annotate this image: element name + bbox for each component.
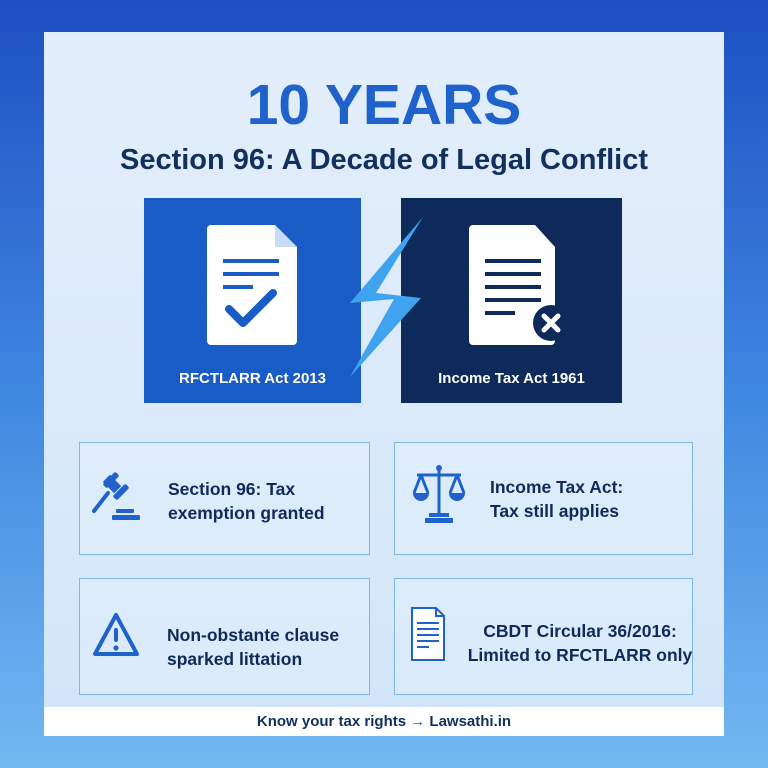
card: CBDT [394, 578, 693, 695]
text: CBDT Circular 36/2016: [483, 621, 677, 641]
text: Limited to RFCTLARR only [468, 645, 692, 665]
card: income tax [394, 442, 693, 555]
text: Non-obstante clause [167, 625, 339, 645]
icon: gavel [92, 472, 140, 520]
footer [44, 707, 724, 736]
footer: Know your tax rights → Lawsathi.in [257, 713, 511, 730]
text: Section 96: Tax [168, 479, 295, 499]
icon: document [411, 607, 445, 661]
panel: RFCTLARR box [144, 198, 361, 403]
panel: Income Tax box [401, 198, 622, 403]
label: Income Tax Act: Income Tax Act 1961 [438, 370, 585, 387]
text [468, 621, 692, 665]
text: exemption granted [168, 503, 325, 523]
text: Income Tax Act: [490, 477, 623, 497]
icon: warning [92, 612, 139, 656]
subtitle: Section 96: A Decade of Legal Conflict [120, 144, 648, 176]
text: Tax still applies [490, 501, 619, 521]
label: RFCTLARR: RFCTLARR Act 2013 [179, 370, 326, 387]
icon: document check [207, 225, 297, 345]
text: sparked littation [167, 649, 302, 669]
card: section 96 [79, 442, 370, 555]
icon: document x [469, 225, 560, 345]
text [167, 625, 339, 669]
text [168, 479, 325, 523]
icon: scales [412, 465, 466, 523]
text [490, 477, 623, 521]
title: 10 YEARS [247, 73, 521, 137]
card: non-obstante [79, 578, 370, 695]
